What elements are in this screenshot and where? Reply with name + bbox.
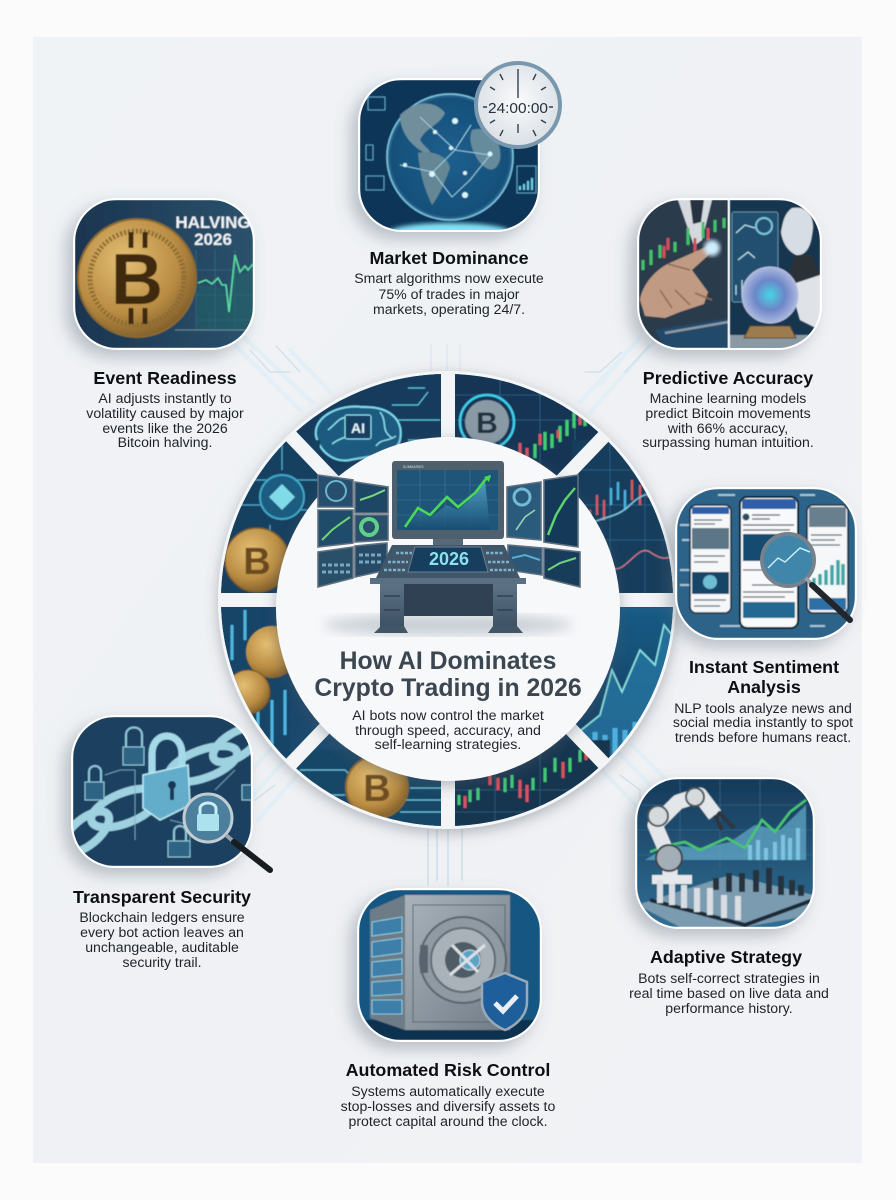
icon: bitcoin halving 2026: HALVING: [175, 213, 251, 232]
description: stop-losses and diversify assets to: [341, 1098, 555, 1114]
icon: trading desk with monitors: [318, 461, 580, 635]
heading: Predictive Accuracy: [643, 368, 813, 388]
heading: Analysis: [727, 677, 801, 697]
description: protect capital around the clock.: [348, 1113, 548, 1129]
segment: coin and circuits: [290, 750, 442, 832]
panel: instant sentiment analysis: [673, 487, 857, 745]
panel: market dominance: [354, 63, 560, 317]
right side monitors: [507, 475, 580, 587]
segment: AI brain: [290, 372, 442, 482]
description: security trail.: [122, 954, 202, 970]
small monitor charts: [322, 481, 576, 572]
control console: 2026: [429, 549, 469, 569]
control console: [370, 545, 526, 584]
icon: vault with shield: [357, 888, 542, 1042]
icon: robot arm playing chess: [635, 777, 815, 929]
description: social media instantly to spot: [673, 714, 853, 730]
heading: Automated Risk Control: [346, 1060, 550, 1080]
description: predict Bitcoin movements: [645, 405, 811, 421]
panel: automated risk control: [341, 888, 555, 1129]
icon: globe with 24 hour clock: [358, 63, 560, 241]
description: with 66% accuracy,: [667, 420, 788, 436]
icon: bitcoin halving 2026: [73, 198, 255, 350]
description: Machine learning models: [650, 390, 806, 406]
heading: Instant Sentiment: [689, 657, 839, 677]
subtitle: AI bots now control the market: [352, 708, 544, 724]
segment: bitcoin chart: [455, 372, 605, 480]
panel: event readiness: [73, 198, 255, 450]
description: markets, operating 24/7.: [373, 301, 525, 317]
description: 75% of trades in major: [378, 286, 520, 302]
description: AI adjusts instantly to: [98, 390, 232, 406]
icon: chain padlock with magnifier: [56, 715, 270, 870]
segment: coin and circuits: B: [363, 768, 391, 810]
segment: candle chart bottom: [455, 740, 610, 830]
heading: Transparent Security: [73, 887, 251, 907]
heading: Market Dominance: [369, 248, 529, 268]
central circle: title hub: [276, 437, 620, 781]
desk pedestals: [374, 584, 523, 633]
icon: bitcoin halving 2026: 2026: [194, 230, 232, 249]
segment: gold coins and candles: [221, 607, 288, 758]
description: unchangeable, auditable: [85, 939, 239, 955]
description: events like the 2026: [102, 420, 228, 436]
panel: transparent security: [56, 715, 270, 970]
main monitor: [392, 461, 504, 545]
ring dividers: [215, 368, 680, 832]
segment: gem and coin: B: [243, 541, 271, 583]
title line two: Crypto Trading in 2026: [314, 675, 582, 702]
icon: bitcoin halving 2026: B: [111, 240, 163, 320]
description: every bot action leaves an: [80, 924, 244, 940]
left side monitors: [318, 475, 388, 587]
description: Blockchain ledgers ensure: [79, 909, 245, 925]
segment: AI brain: AI: [351, 420, 365, 436]
heading: Adaptive Strategy: [650, 947, 802, 967]
segment: market chart right: [572, 440, 676, 593]
description: performance history.: [665, 1000, 793, 1016]
icon: hand and robot with crystal ball: [637, 198, 822, 350]
subtitle: self-learning strategies.: [375, 737, 521, 753]
main monitor: SUMMARIES: [403, 465, 424, 469]
central ring of chart panels: [215, 368, 680, 832]
description: Bots self-correct strategies in: [638, 970, 820, 986]
heading: Event Readiness: [93, 368, 237, 388]
description: Bitcoin halving.: [118, 434, 212, 450]
description: NLP tools analyze news and: [674, 700, 852, 716]
panel: adaptive strategy: [629, 777, 829, 1016]
subtitle: through speed, accuracy, and: [355, 723, 541, 739]
description: real time based on live data and: [629, 985, 829, 1001]
panel: predictive accuracy: [637, 198, 822, 450]
segment: bitcoin chart: B: [476, 407, 498, 440]
icon: phones under magnifying glass: [675, 487, 857, 640]
description: Systems automatically execute: [351, 1083, 545, 1099]
description: surpassing human intuition.: [642, 434, 814, 450]
segment: gem and coin: [220, 440, 320, 593]
description: volatility caused by major: [86, 405, 244, 421]
title: How AI Dominates: [340, 648, 556, 675]
connector circuit lines: [232, 335, 672, 885]
icon: globe with 24 hour clock: 24:00:00: [488, 100, 548, 117]
segment: blue volume chart: [575, 607, 677, 760]
description: trends before humans react.: [675, 729, 851, 745]
description: Smart algorithms now execute: [354, 270, 544, 286]
